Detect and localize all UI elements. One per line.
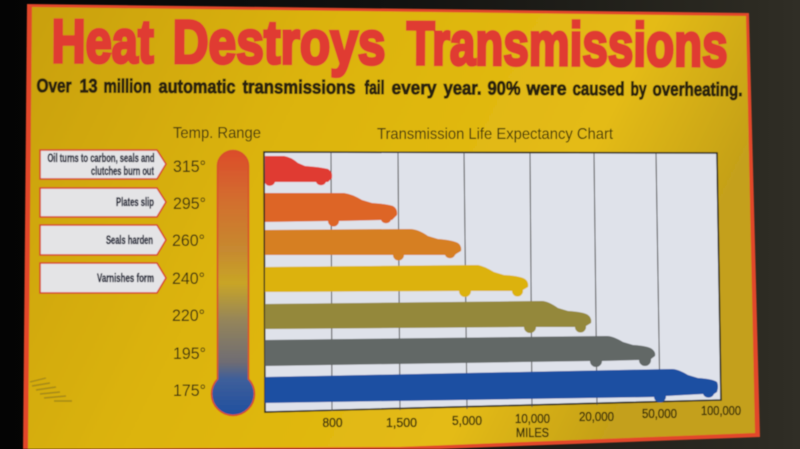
- label: seals harden: [40, 225, 166, 255]
- label: oil turns to carbon: [40, 150, 166, 179]
- temperature scale: 315°: [173, 157, 206, 176]
- mileage axis: 50,000: [642, 406, 677, 421]
- title: [51, 7, 728, 79]
- mileage axis: 20,000: [579, 409, 614, 424]
- subtitle: 13: [79, 76, 98, 97]
- subtitle: were: [526, 79, 567, 100]
- temperature scale: 195°: [173, 344, 206, 363]
- car: 315 degrees, 800 miles: [265, 156, 332, 186]
- car: 195 degrees, 50,000 miles: [265, 336, 655, 367]
- mileage axis: 800: [322, 415, 342, 430]
- mileage axis: 100,000: [701, 403, 741, 418]
- mileage axis: MILES: [516, 425, 549, 440]
- mileage axis: [322, 403, 741, 440]
- chart plot area: [264, 152, 721, 412]
- subtitle: by: [630, 79, 647, 100]
- title: Heat: [51, 7, 154, 76]
- title: Destroys: [172, 8, 386, 77]
- mileage axis: 1,500: [386, 415, 417, 430]
- effect labels: [40, 150, 166, 293]
- temperature scale: 295°: [173, 194, 206, 213]
- label: varnishes form: Varnishes form: [97, 273, 154, 285]
- temperature scale: 260°: [172, 231, 205, 250]
- mileage axis: 10,000: [515, 411, 550, 426]
- subtitle: Over: [36, 76, 72, 97]
- subtitle: fail: [364, 78, 385, 99]
- temperature scale: 175°: [173, 381, 206, 400]
- subtitle: 90%: [487, 79, 521, 100]
- subtitle: [36, 76, 743, 101]
- mileage axis: 5,000: [452, 413, 482, 428]
- subtitle: automatic: [158, 77, 236, 98]
- subtitle: every: [391, 78, 437, 99]
- label: varnishes form: [40, 263, 166, 293]
- grid lines: [331, 152, 660, 411]
- label: seals harden: Seals harden: [106, 235, 153, 247]
- label: oil turns to carbon: Oil turns to carbon, seals and: [48, 153, 154, 165]
- car: 260 degrees, 5,000 miles: [265, 229, 461, 260]
- label: plates slip: Plates slip: [116, 197, 154, 209]
- subtitle: million: [103, 76, 152, 98]
- subtitle: caused: [572, 79, 625, 100]
- smudge on poster: [30, 378, 72, 401]
- car: 240 degrees, 10,000 miles: [265, 265, 528, 297]
- temperature scale: 240°: [172, 269, 205, 288]
- subtitle: overheating.: [652, 79, 743, 101]
- temperature scale: [172, 157, 206, 400]
- car: 220 degrees, 20,000 miles: [265, 301, 591, 333]
- chart heading: Transmission Life Expectancy Chart: [377, 126, 614, 143]
- label: plates slip: [40, 188, 166, 217]
- label: oil turns to carbon: clutches burn out: [91, 166, 154, 178]
- car: 175 degrees, 100,000 miles: [265, 369, 718, 403]
- car: 295 degrees, 1,500 miles: [265, 193, 397, 227]
- temperature range heading: Temp. Range: [173, 125, 261, 142]
- life expectancy chart: [264, 152, 721, 412]
- subtitle: transmissions: [242, 77, 356, 99]
- thermometer: [212, 151, 254, 415]
- temperature scale: 220°: [172, 306, 205, 325]
- subtitle: year.: [443, 78, 482, 99]
